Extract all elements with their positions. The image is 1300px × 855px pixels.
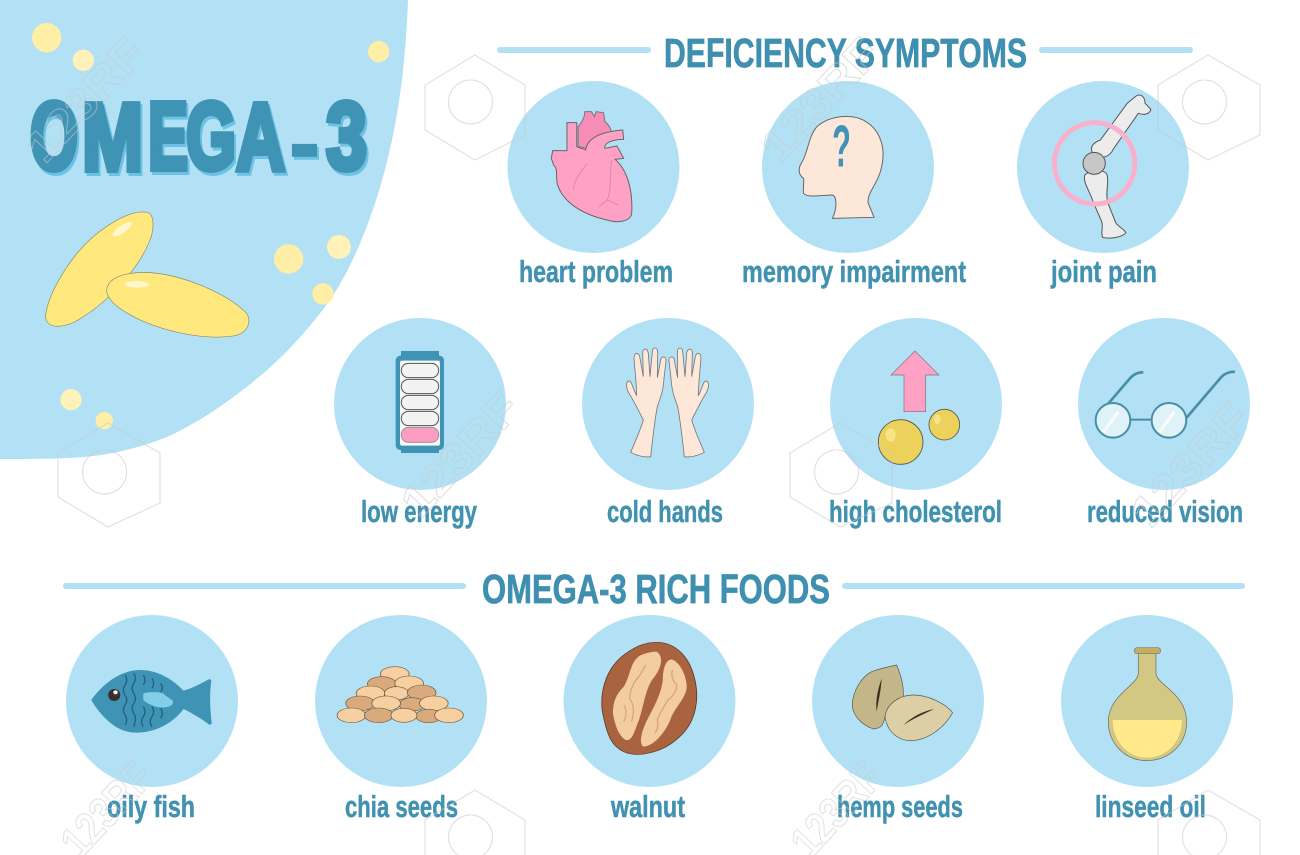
item: chia seeds — [315, 615, 487, 824]
item: heart problem — [508, 81, 680, 289]
icon: low battery — [396, 351, 444, 453]
icon: knee joint bones — [1054, 95, 1151, 238]
title: A — [238, 87, 287, 194]
title: G — [186, 83, 236, 190]
title: 3 — [326, 83, 367, 190]
item: linseed oil — [1061, 615, 1233, 824]
item: hemp seeds — [812, 615, 984, 824]
decorative yellow oil droplets — [32, 23, 389, 429]
icon: two hands — [627, 348, 708, 457]
icon: walnut — [602, 642, 697, 754]
label: reduced vision — [1087, 494, 1243, 529]
item: reduced vision — [1078, 318, 1250, 529]
item: walnut — [564, 615, 736, 824]
title: G — [188, 86, 238, 193]
item: oily fish — [66, 615, 238, 824]
label: joint pain — [1050, 254, 1157, 289]
heading: omega-3 rich foods: OMEGA-3 RICH FOODS — [482, 566, 830, 612]
watermark stamps: 123RF — [391, 384, 530, 527]
title: A — [236, 84, 285, 191]
label: hemp seeds — [837, 789, 963, 824]
watermark stamps: 123RF — [16, 29, 155, 172]
icon: pile of chia seeds — [337, 667, 463, 723]
icon: hemp seeds — [852, 665, 953, 741]
icon: heart — [551, 112, 632, 222]
title: O — [32, 86, 80, 193]
item: joint pain — [1017, 81, 1189, 289]
title: - — [289, 89, 320, 196]
icon: oil flask — [1108, 648, 1187, 761]
icon: fish — [91, 670, 212, 733]
label: walnut — [610, 789, 685, 824]
label: cold hands — [607, 494, 723, 529]
item: memory impairment — [742, 81, 966, 289]
icon: head with question mark — [799, 113, 883, 218]
label: high cholesterol — [829, 494, 1002, 529]
heading: deficiency symptoms: DEFICIENCY SYMPTOMS — [664, 30, 1027, 76]
label: linseed oil — [1095, 789, 1206, 824]
item: low energy — [334, 318, 506, 529]
panel: blue corner shape — [0, 0, 408, 459]
title: - — [291, 92, 322, 199]
label: heart problem — [519, 254, 673, 289]
label: chia seeds — [345, 789, 458, 824]
icon: head with question mark: ? — [832, 113, 851, 179]
item: high cholesterol — [829, 318, 1002, 529]
icon: omega-3 capsules — [46, 212, 249, 337]
title: M — [82, 84, 143, 191]
title: E — [150, 86, 190, 193]
title: 3 — [328, 86, 369, 193]
title: M — [84, 87, 145, 194]
label: memory impairment — [742, 254, 966, 289]
title — [30, 83, 369, 199]
label: oily fish — [107, 789, 195, 824]
icon: up arrow and cholesterol balls — [878, 351, 960, 464]
label: low energy — [361, 494, 478, 529]
watermark stamps: 123RF — [751, 29, 890, 172]
icon: glasses — [1096, 372, 1235, 438]
title: E — [148, 83, 188, 190]
title: O — [30, 83, 78, 190]
item: cold hands — [582, 318, 754, 529]
watermark stamps: 123RF — [1121, 394, 1260, 537]
